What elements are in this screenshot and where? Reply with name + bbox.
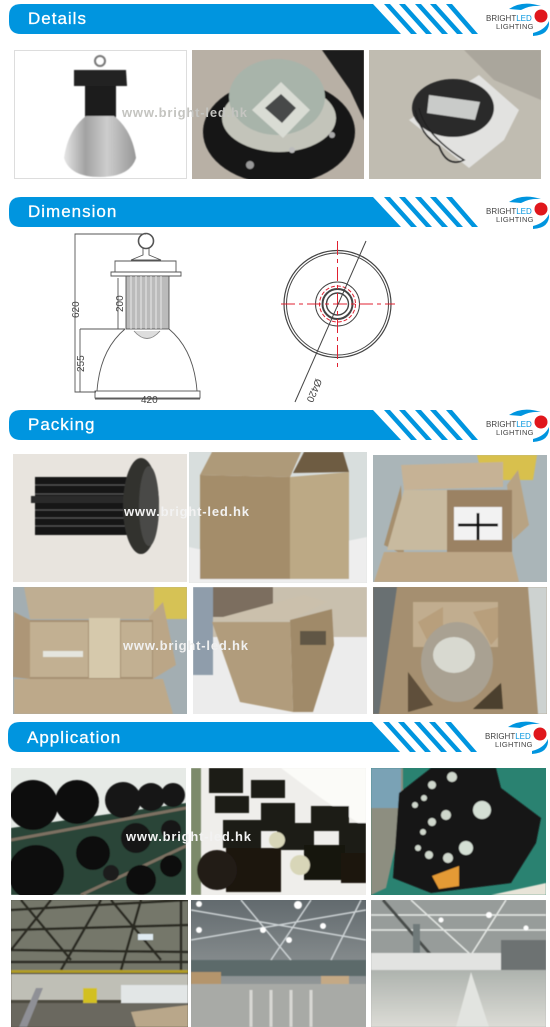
logo: Bright LED Lighting: BRIGHTLED xyxy=(486,14,532,23)
section header: Details xyxy=(9,4,549,36)
photo: lamps on rack xyxy=(11,768,186,895)
logo: Bright LED Lighting xyxy=(486,197,549,229)
logo: Bright LED Lighting xyxy=(485,722,548,754)
logo: Bright LED Lighting xyxy=(486,410,549,442)
photo: bright empty hall xyxy=(371,900,546,1027)
dimension labels: 255 xyxy=(76,355,87,372)
section header: Application xyxy=(8,722,548,754)
photo: high bay lamp xyxy=(14,50,187,179)
watermark: packing row 1: www.bright-led.hk xyxy=(123,504,250,519)
logo: Bright LED Lighting: LIGHTING xyxy=(496,428,534,437)
photo: carton with reflector xyxy=(373,587,547,714)
logo: Bright LED Lighting: BRIGHTLED xyxy=(486,207,532,216)
side view technical drawing xyxy=(71,234,200,406)
heading: Application: Application xyxy=(27,728,121,747)
watermark: application: www.bright-led.hk xyxy=(125,829,252,844)
photo: carton with foam layer xyxy=(13,587,187,714)
logo: Bright LED Lighting: LIGHTING xyxy=(496,215,534,224)
photo: carton on tile floor xyxy=(193,587,367,714)
logo: Bright LED Lighting xyxy=(486,4,549,36)
dimension labels: 620 xyxy=(71,301,82,318)
photo: row of heat sinks xyxy=(191,768,366,895)
logo: Bright LED Lighting: LIGHTING xyxy=(496,22,534,31)
photo: lamps front view xyxy=(371,768,546,895)
heading: Packing: Packing xyxy=(28,415,95,434)
dimension labels: 420 xyxy=(141,395,158,406)
watermark: packing row 2: www.bright-led.hk xyxy=(122,638,249,653)
watermark: details: www.bright-led.hk xyxy=(121,105,248,120)
diameter label: Ø420 xyxy=(304,377,323,404)
logo: Bright LED Lighting: BRIGHTLED xyxy=(486,420,532,429)
heading: Dimension: Dimension xyxy=(28,202,117,221)
logo: Bright LED Lighting: BRIGHTLED xyxy=(485,732,531,741)
top view technical drawing xyxy=(281,241,395,404)
photo: opened carton with inner box xyxy=(373,455,547,582)
photo: workshop interior xyxy=(11,900,188,1027)
logo: Bright LED Lighting: LIGHTING xyxy=(495,740,533,749)
photo: heat sink xyxy=(13,454,187,582)
section header: Packing xyxy=(9,410,549,442)
photo: closed carton xyxy=(189,452,367,583)
dimension labels xyxy=(71,295,158,406)
dimension labels: 200 xyxy=(115,295,126,312)
photo: lens module xyxy=(192,50,364,179)
photo: warehouse with boxes xyxy=(191,900,366,1027)
section header: Dimension xyxy=(9,197,549,229)
photo: driver in housing xyxy=(369,50,541,179)
heading: Details: Details xyxy=(28,9,87,28)
